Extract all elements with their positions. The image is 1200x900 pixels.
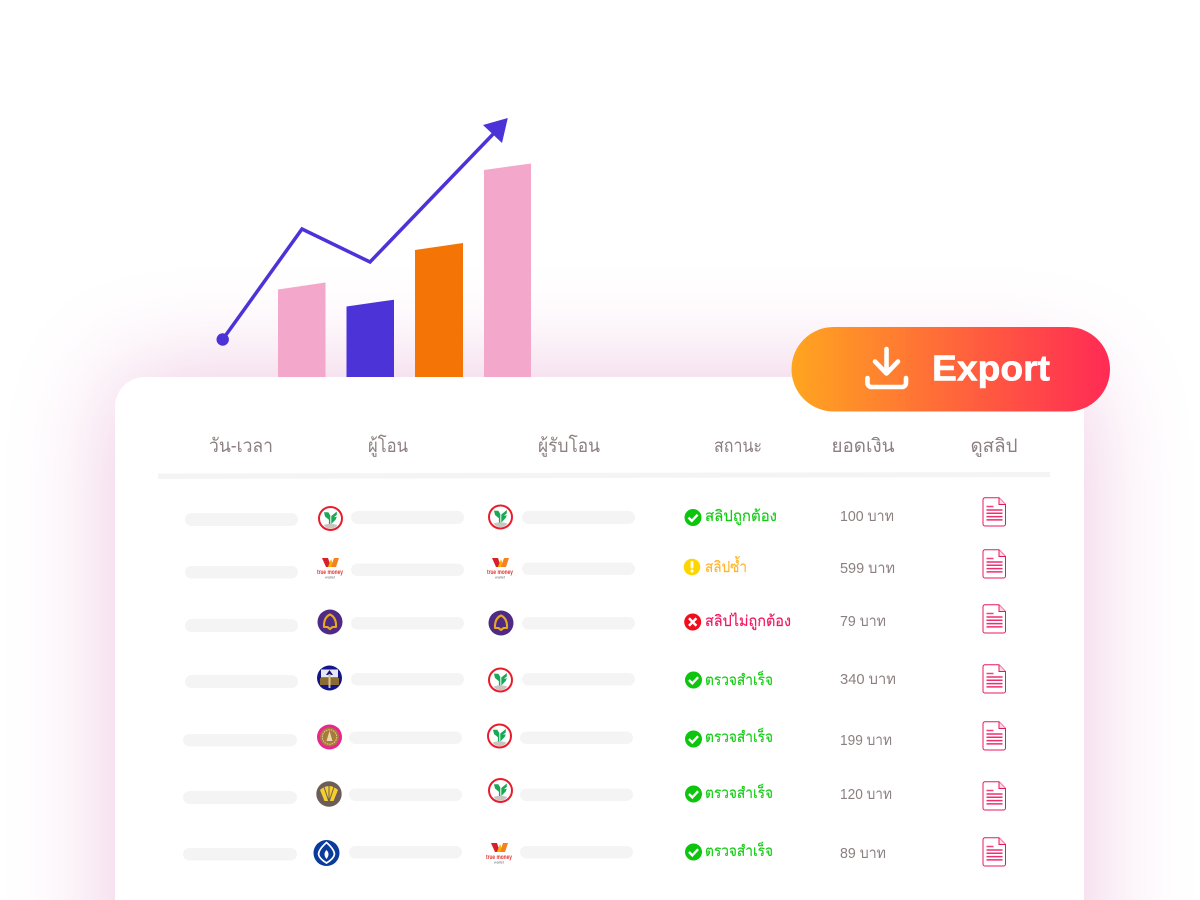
table header: ผู้โอน bbox=[368, 434, 408, 457]
row 1: สลิปถูกต้อง bbox=[705, 508, 777, 525]
logo: truemoney wallet sender: wallet bbox=[325, 574, 336, 580]
arrow: rising trend line bbox=[216, 118, 508, 346]
bar chart bbox=[278, 164, 531, 377]
row 4: 340 บาท bbox=[840, 671, 896, 688]
logo: truemoney wallet receiver: wallet bbox=[495, 574, 506, 580]
row 3 bbox=[185, 605, 1006, 636]
row 4: ตรวจสำเร็จ bbox=[705, 670, 773, 689]
row 1: 100 บาท bbox=[840, 508, 894, 525]
button label: Export bbox=[932, 348, 1050, 388]
table header: ผู้รับโอน bbox=[538, 434, 600, 457]
logo: truemoney wallet receiver row 7 bbox=[486, 843, 512, 864]
row 3: 79 บาท bbox=[840, 613, 886, 630]
row 1 bbox=[185, 498, 1006, 530]
icon: download bbox=[868, 349, 906, 387]
row 7 bbox=[183, 838, 1006, 866]
row 5: ตรวจสำเร็จ bbox=[705, 727, 773, 746]
row 5 bbox=[183, 722, 1006, 750]
row 2: 599 บาท bbox=[840, 560, 895, 577]
logo: pink round bank bbox=[317, 724, 342, 750]
table header: ดูสลิป bbox=[970, 436, 1018, 457]
logo: blue lotus bank bbox=[314, 840, 340, 866]
table header: สถานะ bbox=[714, 436, 762, 457]
icon: warning bbox=[684, 559, 700, 575]
row 2: สลิปซ้ำ bbox=[705, 556, 747, 576]
panel: table card bbox=[115, 377, 1084, 900]
table header: วัน-เวลา bbox=[209, 436, 273, 457]
logo: truemoney wallet sender bbox=[317, 558, 343, 580]
logo: truemoney wallet receiver row 7: true money bbox=[486, 854, 512, 861]
row 4 bbox=[185, 665, 1006, 693]
row 5: 199 บาท bbox=[840, 732, 892, 749]
button: export bbox=[792, 327, 1110, 412]
icon: error bbox=[684, 614, 701, 630]
logo: truemoney wallet receiver: true money bbox=[487, 569, 513, 576]
table header bbox=[158, 434, 1050, 479]
row 3: สลิปไม่ถูกต้อง bbox=[705, 612, 791, 630]
row 6: 120 บาท bbox=[840, 786, 892, 803]
logo: truemoney wallet receiver bbox=[487, 558, 513, 580]
logo: navy bank bbox=[317, 666, 342, 690]
row 6 bbox=[183, 779, 1006, 810]
row 7: ตรวจสำเร็จ bbox=[705, 841, 773, 860]
table header: ยอดเงิน bbox=[832, 436, 894, 457]
row 6: ตรวจสำเร็จ bbox=[705, 783, 773, 802]
row 7: 89 บาท bbox=[840, 845, 886, 862]
logo: grey-brown bank with gold mark bbox=[316, 781, 342, 807]
logo: truemoney wallet sender: true money bbox=[317, 569, 343, 576]
logo: truemoney wallet receiver row 7: wallet bbox=[494, 860, 505, 864]
row 2 bbox=[185, 550, 1006, 580]
